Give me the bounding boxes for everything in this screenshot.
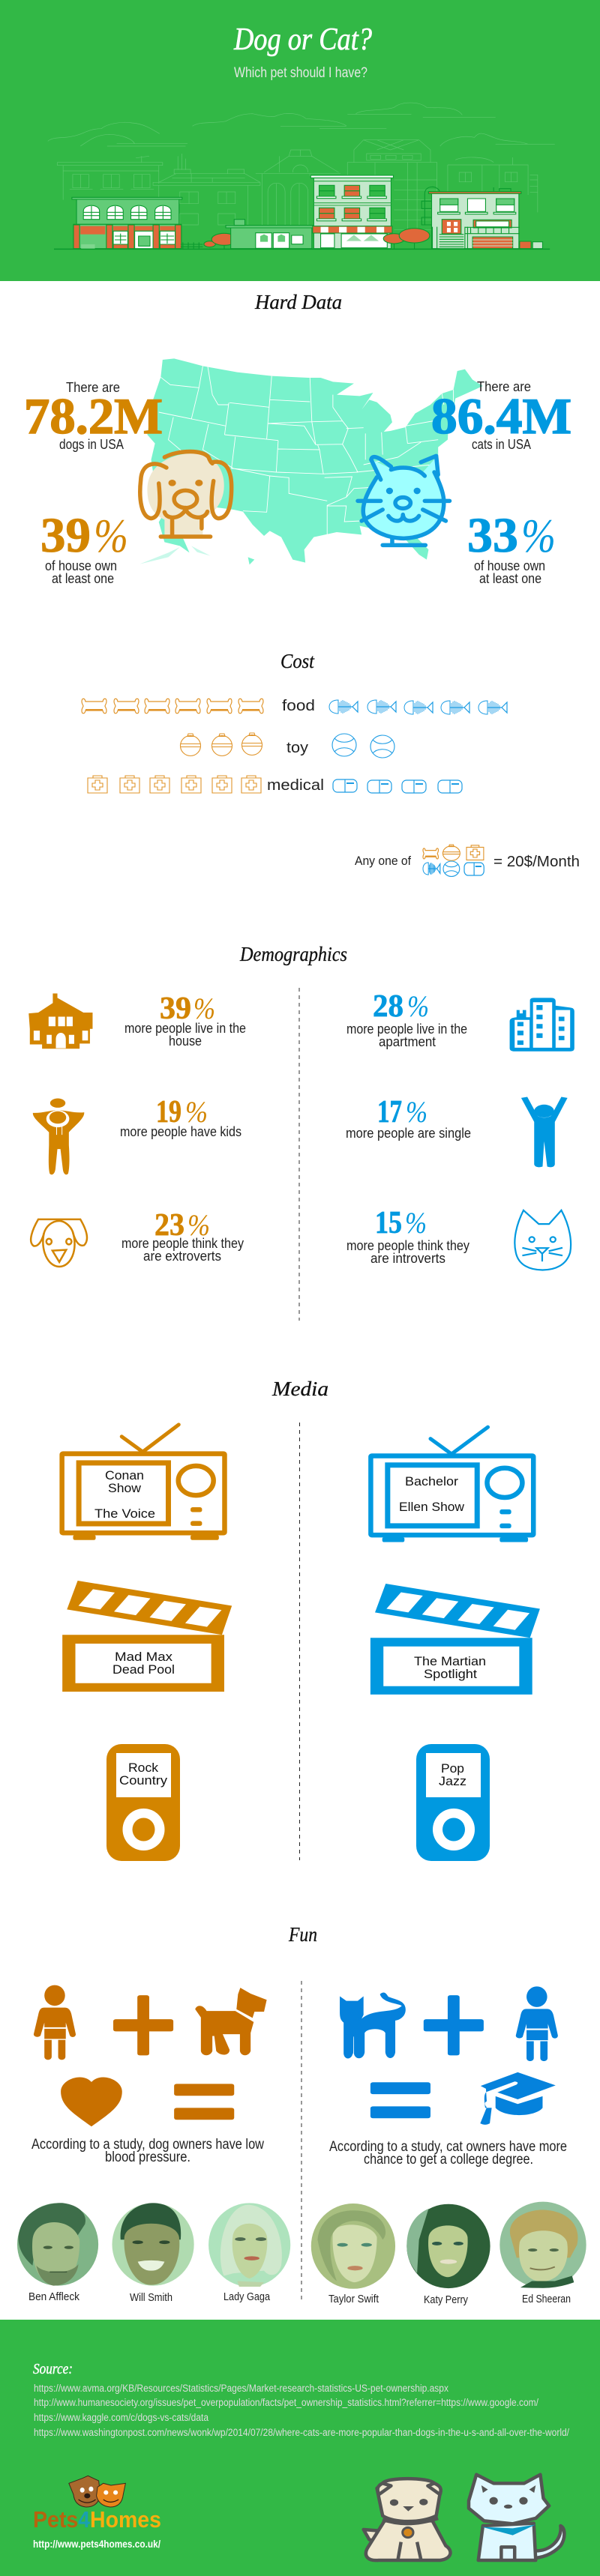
icon: dog tv — [62, 1425, 224, 1540]
stat: live in apartment: 28 — [373, 989, 404, 1024]
text: dog study: blood pressure. — [105, 2150, 190, 2165]
portrait: Katy Perry: Katy Perry — [424, 2293, 468, 2306]
cat household share: 33 — [467, 508, 518, 563]
icon: dog outline — [31, 1219, 87, 1267]
dog household share — [40, 508, 128, 586]
icon: cat outline — [514, 1210, 571, 1270]
dog household share: 39 — [40, 508, 91, 563]
icon: cat music player: Jazz — [439, 1774, 466, 1788]
cat count: cats in USA — [472, 437, 531, 452]
row: medical — [88, 776, 462, 794]
icon: house — [28, 994, 92, 1049]
text: cat study: chance to get a college degree. — [364, 2152, 533, 2168]
illustration: cartoon cat — [469, 2475, 564, 2560]
icon: cat music player: Pop — [441, 1761, 464, 1776]
panel: cost — [82, 650, 580, 876]
icon: cat clapperboard — [370, 1584, 540, 1695]
stat: extroverts: more people think they — [122, 1236, 244, 1251]
icon: equals — [370, 2082, 430, 2118]
panel: footer — [0, 2320, 600, 2576]
equation: dog owner — [34, 1985, 267, 2126]
stat: have kids: % — [185, 1095, 208, 1129]
stat: extroverts: % — [188, 1208, 210, 1242]
stat: introverts: more people think they — [346, 1238, 470, 1253]
legend: cost unit: Any one of — [355, 854, 411, 868]
title: Dog or Cat? — [233, 22, 372, 57]
stat: single — [346, 1095, 471, 1141]
icon: dog clapperboard: Dead Pool — [112, 1662, 175, 1677]
icon: dog music player: Country — [119, 1773, 168, 1788]
portrait: Will Smith — [112, 2203, 194, 2304]
portrait: Taylor Swift — [311, 2204, 395, 2305]
cat household share: at least one — [479, 571, 542, 586]
stat: extroverts — [122, 1208, 244, 1264]
icon: apartment blocks — [510, 998, 574, 1052]
portrait: Ben Affleck — [17, 2203, 98, 2303]
icon: dog clapperboard: Mad Max — [115, 1650, 173, 1664]
icon: cat tv — [370, 1427, 533, 1542]
dog count: dogs in USA — [59, 437, 124, 452]
icon: dog tv: The Voice — [94, 1506, 155, 1521]
icon: dog — [195, 1988, 267, 2055]
icon: equals — [174, 2084, 234, 2120]
cat household share: of house own — [474, 558, 545, 573]
cat household share: % — [521, 509, 556, 562]
stat: live in apartment: apartment — [379, 1034, 436, 1049]
icon: cat face — [358, 456, 449, 545]
stat: single: 17 — [377, 1095, 402, 1129]
portrait: Ed Sheeran: Ed Sheeran — [522, 2293, 571, 2305]
icon: dog music player — [106, 1744, 180, 1861]
source links: https://www.avma.org/KB/Resources/Statistics/Pages/Market-research-statistics-US-pet-ownership.aspx — [34, 2383, 448, 2394]
portrait: Taylor Swift: Taylor Swift — [328, 2293, 380, 2305]
stat: introverts: are introverts — [370, 1251, 446, 1266]
panel: media — [62, 1378, 540, 1861]
icon: single person — [521, 1097, 568, 1167]
heading: demographics: Demographics — [239, 943, 347, 965]
stat: have kids: more people have kids — [120, 1124, 242, 1139]
logo: Pets4Homes: http://www.pets4homes.co.uk/ — [33, 2538, 160, 2550]
panel: fun — [17, 1923, 586, 2306]
portrait: Katy Perry — [406, 2204, 490, 2306]
icon: dog tv: Conan — [105, 1468, 144, 1482]
logo: Pets4Homes — [33, 2476, 161, 2550]
portrait: Lady Gaga: Lady Gaga — [224, 2290, 271, 2303]
dog household share: at least one — [52, 571, 114, 586]
stat: extroverts: 23 — [154, 1208, 184, 1243]
source links: https://www.kaggle.com/c/dogs-vs-cats/data — [34, 2412, 208, 2423]
portrait: Ben Affleck: Ben Affleck — [28, 2290, 80, 2303]
map of USA — [140, 358, 483, 564]
icon: plus — [113, 1995, 173, 2055]
source links — [34, 2383, 569, 2438]
panel: demographics — [28, 943, 574, 1321]
equation: cat owner — [340, 1986, 558, 2125]
row: food: food — [282, 698, 315, 714]
icon: cat tv: Bachelor — [405, 1474, 458, 1488]
logo: Pets4Homes: Pets4Homes — [33, 2506, 161, 2533]
legend: cost unit: = 20$/Month — [494, 854, 580, 870]
text: cat study — [329, 2139, 567, 2168]
stat: live in apartment: more people live in the — [346, 1022, 467, 1037]
icon: dog clapperboard — [62, 1581, 232, 1692]
icon: parent carrying child — [33, 1099, 84, 1174]
row: medical: medical — [267, 777, 324, 794]
stat: single: more people are single — [346, 1126, 471, 1141]
icon: dog music player: Rock — [128, 1761, 159, 1775]
icon: person — [516, 1986, 558, 2061]
subtitle: Which pet should I have? — [234, 65, 368, 81]
stat: live in house — [124, 992, 246, 1049]
heading: media: Media — [272, 1378, 328, 1400]
stat: extroverts: are extroverts — [143, 1249, 221, 1264]
heading: cost: Cost — [280, 650, 315, 672]
row: toy: toy — [286, 740, 308, 756]
illustration: city street — [48, 103, 555, 249]
text: dog study — [32, 2137, 264, 2165]
cat household share — [467, 508, 556, 586]
dog household share: of house own — [45, 558, 117, 573]
icon: cat tv: Ellen Show — [399, 1500, 465, 1514]
heading: fun: Fun — [288, 1923, 317, 1946]
dog household share: % — [94, 509, 128, 562]
legend: cost unit — [355, 845, 580, 876]
icon: plus — [424, 1995, 484, 2055]
icon: cat music player — [416, 1744, 490, 1861]
icon: cat clapperboard: The Martian — [414, 1654, 486, 1668]
stat: live in house: house — [169, 1034, 202, 1049]
icon: graduation cap — [480, 2072, 556, 2125]
icon: person — [34, 1985, 76, 2060]
text: dog study: According to a study, dog owners have low — [32, 2137, 264, 2153]
stat: have kids: 19 — [156, 1095, 182, 1129]
heading: hard data: Hard Data — [254, 291, 342, 313]
stat: have kids — [120, 1095, 242, 1139]
row: toy — [180, 733, 394, 758]
source links: http://www.humanesociety.org/issues/pet_overpopulation/facts/pet_ownership_statistics.html?referrer=https://www.google.com/ — [34, 2397, 538, 2408]
source heading: Source: — [33, 2361, 73, 2377]
stat: live in house: % — [194, 992, 215, 1025]
panel: hard data — [24, 291, 572, 586]
stat: live in house: 39 — [160, 992, 191, 1026]
icon: cat clapperboard: Spotlight — [424, 1667, 477, 1681]
stat: live in apartment — [346, 989, 467, 1049]
stat: live in apartment: % — [407, 989, 429, 1023]
illustration: cartoon dog — [364, 2479, 451, 2560]
panel: header banner — [0, 0, 600, 281]
stat: introverts — [346, 1206, 470, 1266]
cat count: There are — [477, 379, 531, 394]
stat: introverts: % — [405, 1206, 427, 1240]
icon: heart — [61, 2077, 122, 2126]
icon: cat — [340, 1993, 406, 2058]
stat: single: % — [406, 1095, 428, 1129]
row: food — [82, 698, 507, 714]
icon: dog face — [140, 451, 232, 537]
stat: introverts: 15 — [375, 1206, 402, 1240]
portrait: Will Smith: Will Smith — [130, 2291, 172, 2304]
dog count: 78.2M — [24, 387, 163, 444]
portrait: Lady Gaga — [208, 2203, 290, 2303]
icon: dog tv: Show — [108, 1481, 142, 1495]
text: cat study: According to a study, cat owners have more — [329, 2139, 567, 2155]
dog count: There are — [66, 380, 120, 395]
cat count: 86.4M — [431, 387, 572, 444]
stat: live in house: more people live in the — [124, 1021, 246, 1036]
portrait: Ed Sheeran — [500, 2202, 586, 2305]
